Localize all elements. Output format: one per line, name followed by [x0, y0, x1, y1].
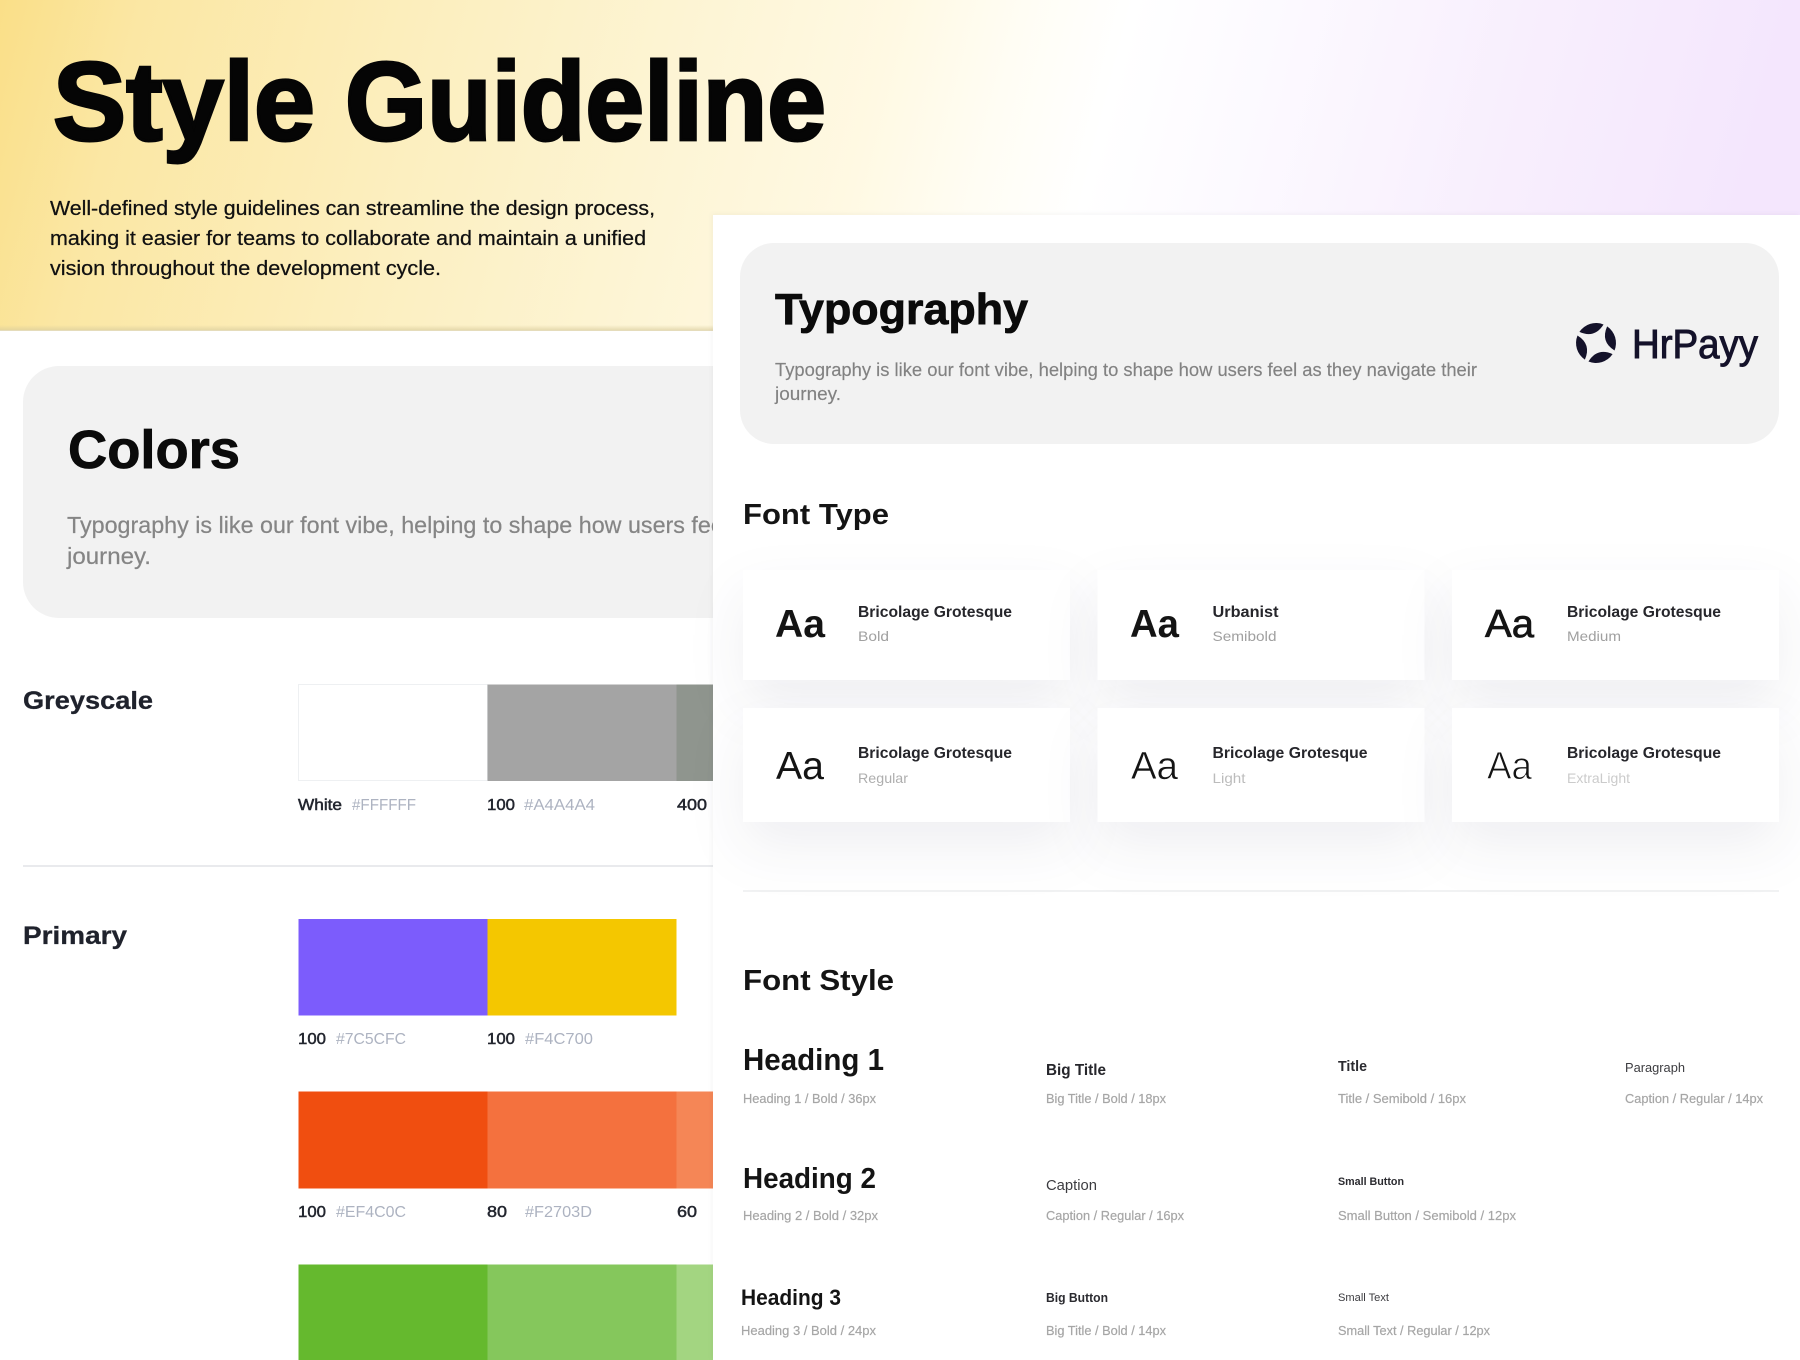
card: Urbanist Semibold: Semibold — [1212, 628, 1276, 644]
title — [53, 40, 826, 164]
greyscale values: #A4A4A4 — [524, 797, 595, 814]
card: Bricolage Grotesque ExtraLight — [1487, 745, 1721, 788]
style: Big Title: Big Title / Bold / 18px — [1046, 1091, 1166, 1106]
style: Heading 2: Heading 2 — [743, 1163, 876, 1195]
logo: HrPayy — [1571, 318, 1758, 368]
card: Bricolage Grotesque Medium — [1485, 603, 1721, 646]
colors header card — [23, 366, 957, 618]
style: Small Text: Small Text / Regular / 12px — [1338, 1323, 1490, 1338]
colors description: journey. — [66, 543, 151, 569]
style: Caption — [1046, 1177, 1184, 1223]
style: Big Title: Big Title — [1046, 1062, 1106, 1079]
style: Caption: Caption / Regular / 16px — [1046, 1208, 1184, 1223]
card: Bricolage Grotesque Regular: Regular — [858, 770, 908, 786]
style: Small Text — [1338, 1292, 1490, 1338]
style: Heading 1: Heading 1 / Bold / 36px — [743, 1091, 876, 1106]
card: Bricolage Grotesque Regular: Bricolage Grotesque — [858, 745, 1012, 762]
orange values: #F2703D — [525, 1204, 592, 1221]
primary values: #F4C700 — [525, 1031, 593, 1048]
style: Paragraph — [1625, 1060, 1763, 1106]
style: Title — [1338, 1059, 1466, 1106]
style: Small Button: Small Button / Semibold / 12px — [1338, 1208, 1516, 1223]
orange values: 100 — [298, 1204, 326, 1221]
card: Bricolage Grotesque Light: Bricolage Grotesque — [1212, 745, 1368, 762]
style: Paragraph: Paragraph — [1625, 1060, 1685, 1075]
primary values: #7C5CFC — [336, 1031, 406, 1048]
typography description: journey. — [774, 384, 841, 404]
style: Small Text: Small Text — [1338, 1292, 1389, 1304]
greyscale values: 400 — [677, 797, 707, 814]
panel: colors — [23, 366, 957, 1360]
greyscale values: White — [298, 797, 342, 814]
primary values: 100 — [298, 1031, 326, 1048]
card: Bricolage Grotesque Medium: Aa — [1485, 603, 1534, 646]
style: Small Button: Small Button — [1338, 1176, 1404, 1188]
style: Heading 3: Heading 3 — [741, 1285, 841, 1310]
font style specimens — [741, 1042, 1763, 1338]
card: Bricolage Grotesque ExtraLight: Bricolage Grotesque — [1567, 745, 1721, 762]
header intro paragraph: Well-defined style guidelines can streamline the design process, — [50, 198, 655, 220]
greyscale swatches — [298, 684, 736, 781]
greyscale label: Greyscale — [23, 687, 153, 715]
card: Bricolage Grotesque Regular: Aa — [776, 745, 824, 788]
typography heading: Typography — [775, 285, 1029, 334]
style: Paragraph: Caption / Regular / 14px — [1625, 1091, 1763, 1106]
style: Heading 2 — [743, 1163, 878, 1223]
style: Big Button: Big Title / Bold / 14px — [1046, 1323, 1166, 1338]
card: Bricolage Grotesque Medium: Medium — [1567, 628, 1621, 644]
title: Style — [53, 40, 315, 164]
primary label: Primary — [23, 922, 127, 950]
card: Bricolage Grotesque Regular — [776, 745, 1012, 788]
title: Guideline — [345, 40, 826, 164]
primary values — [298, 1031, 593, 1048]
colors description — [66, 512, 957, 569]
typography description: Typography is like our font vibe, helping to shape how users feel as they navigate their — [775, 360, 1477, 380]
primary swatches — [298, 919, 676, 1016]
card: Bricolage Grotesque Bold: Bricolage Grotesque — [858, 604, 1012, 621]
header gradient banner — [0, 0, 1800, 331]
style: Title: Title — [1338, 1059, 1367, 1075]
panel: typography — [713, 215, 1800, 1360]
card: Bricolage Grotesque ExtraLight: ExtraLight — [1567, 770, 1630, 786]
header intro paragraph: making it easier for teams to collaborate and maintain a unified — [50, 228, 646, 250]
card: Urbanist Semibold — [1130, 603, 1279, 646]
header intro paragraph — [50, 198, 655, 280]
style: Heading 2: Heading 2 / Bold / 32px — [743, 1208, 878, 1223]
logo wordmark: HrPayy — [1632, 321, 1758, 367]
typography description — [774, 360, 1477, 404]
orange values: 60 — [677, 1204, 697, 1221]
greyscale values — [298, 797, 707, 814]
typography header card — [740, 243, 1779, 444]
card: Bricolage Grotesque Bold: Aa — [775, 603, 825, 646]
font type heading: Font Type — [743, 499, 889, 531]
card: Bricolage Grotesque Light: Light — [1212, 770, 1246, 786]
green swatches — [298, 1264, 736, 1360]
orange swatches — [298, 1092, 736, 1188]
style: Big Button: Big Button — [1046, 1290, 1108, 1305]
style: Title: Title / Semibold / 16px — [1338, 1091, 1466, 1106]
card: Urbanist Semibold: Urbanist — [1212, 604, 1279, 621]
style: Heading 1 — [743, 1042, 884, 1106]
card: Urbanist Semibold: Aa — [1130, 603, 1179, 646]
style: Big Button — [1046, 1290, 1166, 1338]
primary values: 100 — [487, 1031, 515, 1048]
card: Bricolage Grotesque Light — [1131, 745, 1368, 788]
style: Small Button — [1338, 1176, 1516, 1223]
greyscale values: #FFFFFF — [352, 797, 416, 814]
font style heading: Font Style — [743, 965, 894, 997]
style: Heading 1: Heading 1 — [743, 1042, 884, 1077]
style: Caption: Caption — [1046, 1177, 1097, 1194]
icon: logo mark — [1571, 318, 1621, 368]
orange values — [298, 1204, 697, 1221]
style: Big Title — [1046, 1062, 1166, 1106]
card: Bricolage Grotesque ExtraLight: Aa — [1487, 745, 1532, 788]
greyscale values: 100 — [487, 797, 515, 814]
card: Bricolage Grotesque Medium: Bricolage Grotesque — [1567, 604, 1721, 621]
header intro paragraph: vision throughout the development cycle. — [50, 258, 441, 280]
card: Bricolage Grotesque Bold: Bold — [858, 628, 889, 644]
orange values: 80 — [487, 1204, 507, 1221]
font type cards — [743, 570, 1779, 822]
style: Heading 3: Heading 3 / Bold / 24px — [741, 1323, 876, 1338]
style: Heading 3 — [741, 1285, 876, 1338]
orange values: #EF4C0C — [336, 1204, 406, 1221]
colors heading: Colors — [68, 420, 240, 480]
card: Bricolage Grotesque Bold — [775, 603, 1012, 646]
colors description: Typography is like our font vibe, helping to shape how users feel as they navigate their — [67, 512, 957, 538]
card: Bricolage Grotesque Light: Aa — [1131, 745, 1178, 788]
